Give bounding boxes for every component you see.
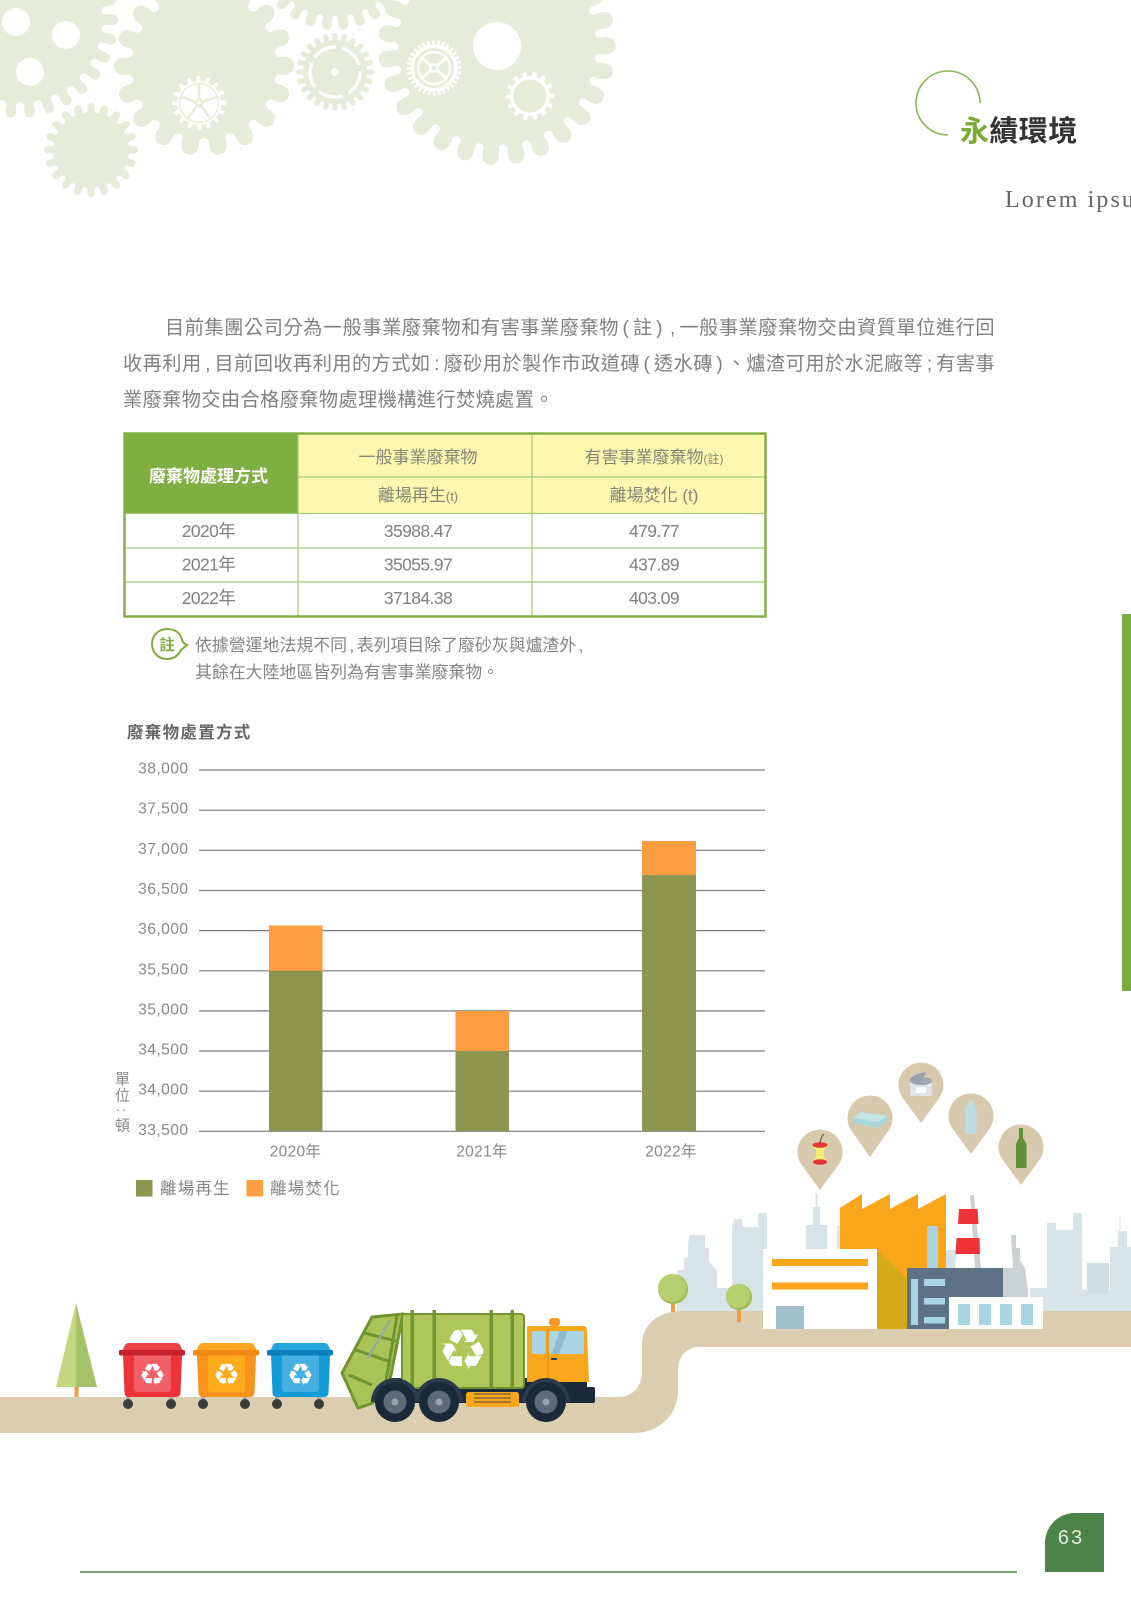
factory — [763, 1194, 1043, 1329]
y axis labels: 34,500 — [138, 1042, 188, 1058]
waste pins — [798, 1062, 1044, 1190]
table footnote — [195, 636, 584, 682]
table rows: 35988.47 — [384, 521, 452, 541]
footnote line 2: 其餘在大陸地區皆列為有害事業廢棄物。 — [195, 663, 499, 682]
bars 2021 — [456, 1011, 509, 1131]
garbage truck: ♻ — [438, 1318, 488, 1383]
pin: tin can — [898, 1062, 944, 1123]
x axis labels: 2022年 — [645, 1142, 697, 1160]
chassis — [373, 1378, 587, 1403]
table rows — [182, 521, 679, 608]
factory blue chimney — [927, 1226, 938, 1269]
table rows: 479.77 — [629, 521, 679, 541]
small white cog lower right — [508, 74, 552, 118]
white low block — [949, 1297, 1043, 1329]
table rows: 2021年 — [182, 554, 235, 574]
section logo: 永績環境 — [916, 71, 1078, 148]
white cog in right gear — [409, 43, 459, 93]
table rows: 2022年 — [182, 588, 235, 608]
x axis labels: 2021年 — [456, 1142, 508, 1160]
grey stepped stack — [1003, 1235, 1028, 1297]
table header labels: 離場再生(t) — [378, 486, 458, 505]
table rows: 2020年 — [182, 521, 235, 541]
recycling bin: orange: ♻ — [213, 1358, 240, 1393]
y axis labels: 36,000 — [138, 921, 188, 938]
recycling bin: blue — [267, 1343, 333, 1409]
table rows: 403.09 — [629, 588, 679, 608]
y axis labels: 38,000 — [138, 760, 188, 778]
footnote line 1: 依據營運地法規不同,表列項目除了廢砂灰與爐渣外, — [195, 636, 584, 655]
garbage truck — [342, 1310, 595, 1422]
y axis labels — [138, 760, 188, 1139]
table rows: 37184.38 — [384, 588, 452, 608]
note bubble icon — [152, 629, 187, 659]
y axis labels: 35,000 — [138, 1001, 188, 1018]
y axis labels: 33,500 — [138, 1122, 188, 1139]
chart title: 廢棄物處置方式 — [127, 722, 252, 742]
wheels — [371, 1378, 570, 1422]
pine tree — [56, 1303, 97, 1397]
white cog in second gear — [174, 78, 224, 128]
slate block — [907, 1268, 1023, 1329]
truck cab — [527, 1326, 589, 1382]
recycling bin: red: ♻ — [139, 1358, 166, 1393]
page number tab: 63 — [1058, 1527, 1084, 1549]
note bubble icon: 註 — [159, 635, 175, 654]
chart legend: 離場焚化 — [270, 1179, 341, 1198]
y axis unit label: 單位 : 頓 — [113, 1071, 130, 1134]
skyline background — [677, 1193, 1131, 1311]
pin: glass bottle — [998, 1124, 1044, 1185]
recycling bin: blue: ♻ — [287, 1358, 314, 1393]
side accent bar — [1122, 614, 1131, 991]
gridlines — [199, 770, 765, 1131]
white office block — [763, 1249, 877, 1329]
y axis labels: 34,000 — [138, 1082, 188, 1099]
decorative gears header — [0, 0, 608, 194]
page number tab — [1045, 1513, 1104, 1572]
recycling bin: red — [119, 1343, 185, 1409]
paragraph line 1: 目前集團公司分為一般事業廢棄物和有害事業廢棄物(註) ,一般事業廢棄物交由資質單位進行回 — [165, 318, 995, 339]
table header labels: 廢棄物處理方式 — [149, 466, 268, 486]
paragraph line 3: 業廢棄物交由合格廢棄物處理機構進行焚燒處置。 — [123, 390, 554, 411]
section logo: 永績環境: 永績環境 — [960, 115, 1078, 148]
bumper — [578, 1387, 595, 1403]
table header labels: 離場焚化 (t) — [610, 486, 698, 505]
body paragraph — [123, 317, 995, 411]
truck box — [402, 1314, 524, 1388]
winding road — [0, 1311, 1131, 1433]
footer rule — [80, 1571, 1017, 1573]
recycling bin: orange — [193, 1343, 259, 1409]
table header labels — [149, 448, 724, 505]
table rows: 437.89 — [629, 554, 679, 574]
fuel tank — [466, 1392, 519, 1407]
bars 2020 — [269, 926, 322, 1131]
y axis labels: 37,000 — [138, 841, 188, 858]
pin: newspapers — [848, 1095, 893, 1157]
red and white smokestack — [955, 1195, 981, 1268]
y axis labels: 35,500 — [138, 961, 188, 978]
y axis labels: 36,500 — [138, 881, 188, 898]
roadside round trees — [658, 1274, 752, 1322]
paragraph line 2: 收再利用,目前回收再利用的方式如:廢砂用於製作市政道磚(透水磚)、爐渣可用於水泥廠等;有害事 — [123, 354, 995, 375]
chart legend: 離場再生 — [160, 1179, 231, 1198]
pin: apple core — [798, 1129, 843, 1190]
x axis labels — [270, 1142, 697, 1160]
pin: plastic bottle — [948, 1093, 994, 1154]
table header labels: 一般事業廢棄物 — [358, 448, 478, 467]
truck rear loader — [342, 1314, 403, 1408]
data table — [124, 433, 766, 617]
x axis labels: 2020年 — [270, 1142, 321, 1160]
table header labels: 有害事業廢棄物(註) — [584, 448, 724, 467]
chart legend — [136, 1179, 341, 1198]
table rows: 35055.97 — [384, 554, 452, 574]
y axis labels: 37,500 — [138, 801, 188, 818]
bars 2022 — [642, 841, 696, 1131]
stacked bar chart — [138, 760, 765, 1160]
